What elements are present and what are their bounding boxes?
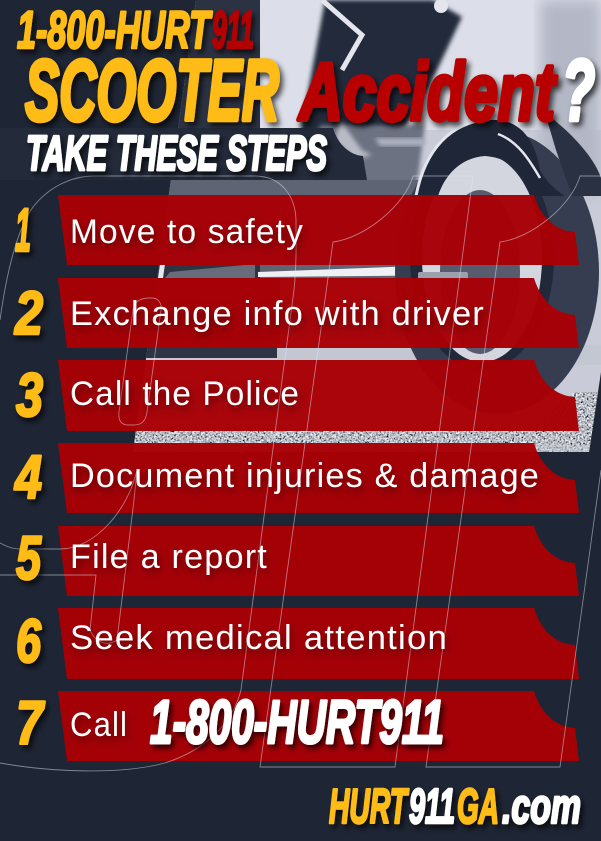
number 7: 7 <box>16 689 45 757</box>
step 4 text: Document injuries & damage <box>70 457 540 495</box>
step 5 text: File a report <box>70 538 268 576</box>
website url <box>329 780 581 834</box>
number 4: 4 <box>13 443 42 511</box>
step 3 text: Call the Police <box>70 375 300 413</box>
bar 2 <box>58 278 579 348</box>
step 2 text: Exchange info with driver <box>70 295 485 333</box>
asphalt ground <box>130 395 601 452</box>
bar 4 <box>58 443 579 513</box>
step 7 text: Call <box>70 706 128 744</box>
outline 911 watermark <box>0 176 601 771</box>
step labels <box>70 213 540 744</box>
bar 7 <box>58 691 579 761</box>
step bars <box>58 195 579 761</box>
bar 6 <box>58 608 579 679</box>
bar 3 <box>58 360 579 431</box>
step numbers <box>13 196 45 757</box>
subtitle: TAKE THESE STEPS <box>26 127 327 181</box>
scooter photo <box>130 0 601 452</box>
headline scooter accident: SCOOTER <box>25 43 279 139</box>
fender <box>416 120 565 196</box>
number 5: 5 <box>16 524 42 592</box>
headline phone number: 1-800-HURT <box>17 1 213 60</box>
step 1 text: Move to safety <box>70 213 304 251</box>
step 6 text: Seek medical attention <box>70 619 448 657</box>
infographic canvas: 911 <box>212 1 254 60</box>
step 7 phone number: 1-800-HURT911 <box>150 688 444 756</box>
step numbers: 1 <box>15 196 31 264</box>
number 6: 6 <box>16 607 42 675</box>
bar 1 <box>58 195 579 265</box>
number 2: 2 <box>14 279 43 347</box>
website url: GA <box>457 780 499 834</box>
header panel behind subtitle <box>0 128 367 180</box>
bar 5 <box>58 526 579 596</box>
wheel tire <box>395 136 599 390</box>
website url: HURT <box>329 780 409 834</box>
number 3: 3 <box>16 361 43 429</box>
website url: 911 <box>409 780 455 834</box>
